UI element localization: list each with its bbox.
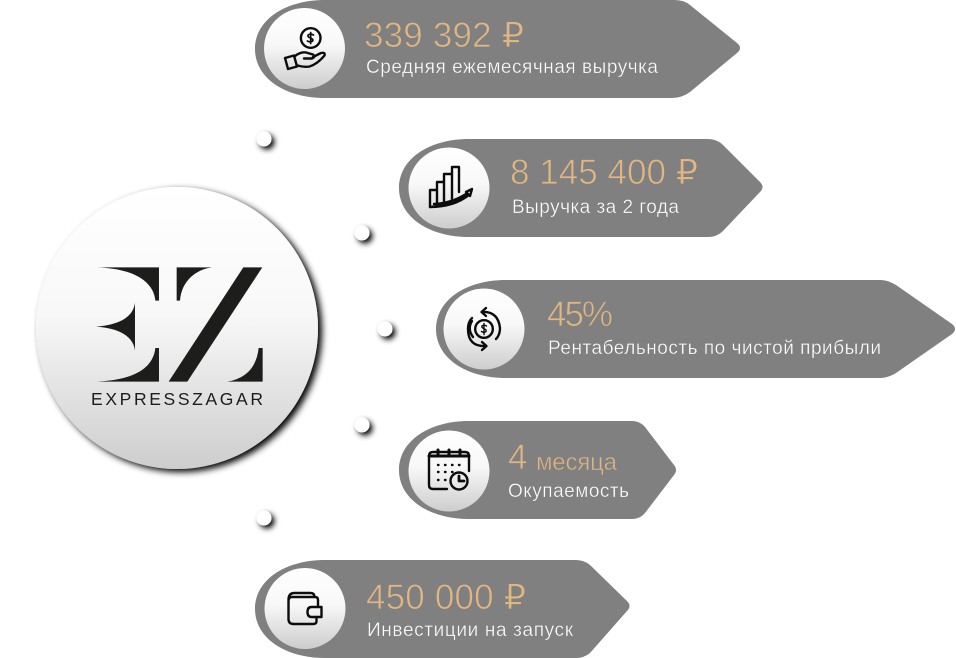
panel: two-year revenue [399, 139, 762, 237]
panel: net margin [436, 280, 955, 378]
value: 339 392 ₽ [364, 16, 524, 55]
icon: calendar with clock [429, 450, 469, 490]
value: 450 000 ₽ [366, 578, 526, 617]
label: Рентабельность по чистой прибыли [548, 338, 881, 359]
label: Средняя ежемесячная выручка [366, 57, 658, 78]
label: Инвестиции на запуск [367, 620, 574, 641]
icon: hand with coin [285, 28, 325, 69]
central logo badge [36, 187, 318, 469]
label: Выручка за 2 года [512, 197, 679, 218]
icon: circular money arrows [468, 308, 500, 350]
panel: investment [255, 560, 630, 658]
panel: monthly revenue [255, 0, 740, 98]
icon: growth chart [430, 167, 472, 207]
panel: payback: месяца [536, 449, 618, 476]
value: 45% [547, 295, 613, 334]
panel: payback [399, 421, 676, 519]
value: 4 [508, 438, 527, 477]
value: 8 145 400 ₽ [510, 153, 698, 192]
logo: EZ monogram [96, 267, 263, 382]
icon: wallet [288, 593, 322, 624]
logo wordmark: EXPRESSZAGAR [91, 389, 263, 409]
connector dots [256, 132, 392, 526]
label: Окупаемость [508, 481, 629, 502]
